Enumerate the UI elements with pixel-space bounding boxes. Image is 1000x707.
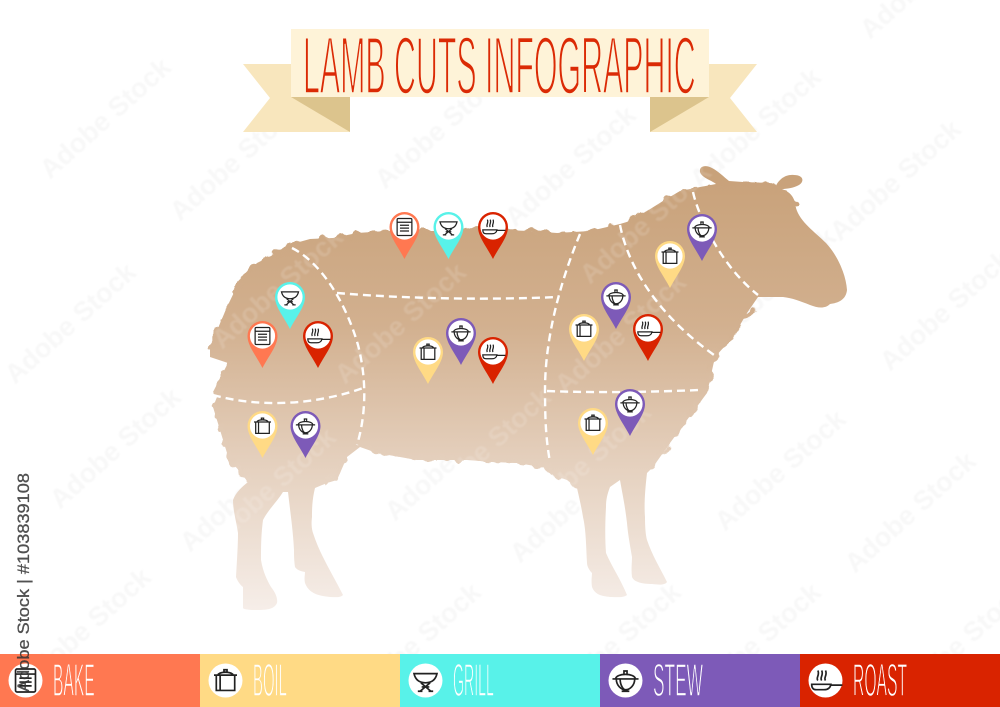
ribbon right tail [650,64,757,132]
pin: boil, shank [248,411,278,458]
wool edges [212,184,794,485]
watermark layer: Adobe Stock [44,381,187,514]
extra watermark on sheep: Adobe Stock [206,221,349,354]
pin: bake, saddle [390,212,420,259]
extra watermark on sheep: Adobe Stock [514,396,657,529]
sheep body [210,166,847,610]
pin: boil, neck [655,241,685,288]
pin: roast, shoulder [633,314,663,361]
watermark layer: Adobe Stock [369,61,512,194]
pin: stew, shoulder [601,282,631,329]
pin: roast, breast [478,337,508,384]
ribbon front [291,29,709,97]
watermark layer: Adobe Stock [699,221,842,354]
pins [248,212,717,458]
legend: bake [0,654,200,707]
watermark layer: Adobe Stock [504,435,647,568]
extra watermark on sheep: Adobe Stock [549,266,692,399]
watermark layer: Adobe Stock [164,93,307,226]
legend: boil [200,654,400,707]
legend: stew: STEW [653,656,703,707]
legend: stew [600,654,800,707]
extra watermark on sheep: Adobe Stock [329,256,472,389]
pin: boil, foreshank [578,408,608,455]
pin: boil, shoulder [569,314,599,361]
pin: grill, saddle [434,212,464,259]
pin: stew, foreshank [615,389,645,436]
legend: roast: ROAST [853,656,907,707]
pin: grill, leg [275,282,305,329]
legend: boil: BOIL [253,656,287,707]
watermark layer: Adobe Stock [684,576,827,707]
title ribbon [243,21,757,132]
watermark layer: Adobe Stock [379,393,522,526]
stock credit: Adobe Stock | #103839108 [14,473,33,692]
pin: roast, leg [303,321,333,368]
pin: bake, leg [248,321,278,368]
pin: boil, breast [413,337,443,384]
pin: roast, saddle [478,212,508,259]
watermark layer: Adobe Stock [684,61,827,194]
watermark layer: Adobe Stock [709,403,852,536]
title: LAMB CUTS INFOGRAPHIC [303,21,696,112]
extra watermark on sheep: Adobe Stock [199,421,342,554]
watermark layer: Adobe Stock [34,51,177,184]
legend: grill: GRILL [453,655,494,707]
legend: bake: BAKE [53,656,95,707]
extra watermark on sheep: Adobe Stock [574,156,717,289]
watermark layer: Adobe Stock [499,99,642,232]
ribbon left tail [243,64,350,132]
watermark layer: Adobe Stock [839,445,982,578]
pin: stew, neck [687,214,717,261]
sheep silhouette [210,166,847,610]
legend: grill [400,654,600,707]
cut lines [213,192,758,462]
watermark layer: Adobe Stock [174,424,317,557]
watermark layer: Adobe Stock [544,576,687,707]
watermark layer: Adobe Stock [824,113,967,246]
legend: roast [800,654,1000,707]
ribbon left fold [291,97,350,132]
ribbon right fold [650,97,709,132]
watermark layer: Adobe Stock [0,256,142,389]
extra watermark on sheep: Adobe Stock [414,381,557,514]
pin: stew, breast [446,318,476,365]
pin: stew, shank [290,411,320,458]
watermark layer: Adobe Stock [14,561,157,694]
legend [0,654,1000,707]
watermark layer: Adobe Stock [344,576,487,707]
extra watermark on sheep [199,156,717,554]
